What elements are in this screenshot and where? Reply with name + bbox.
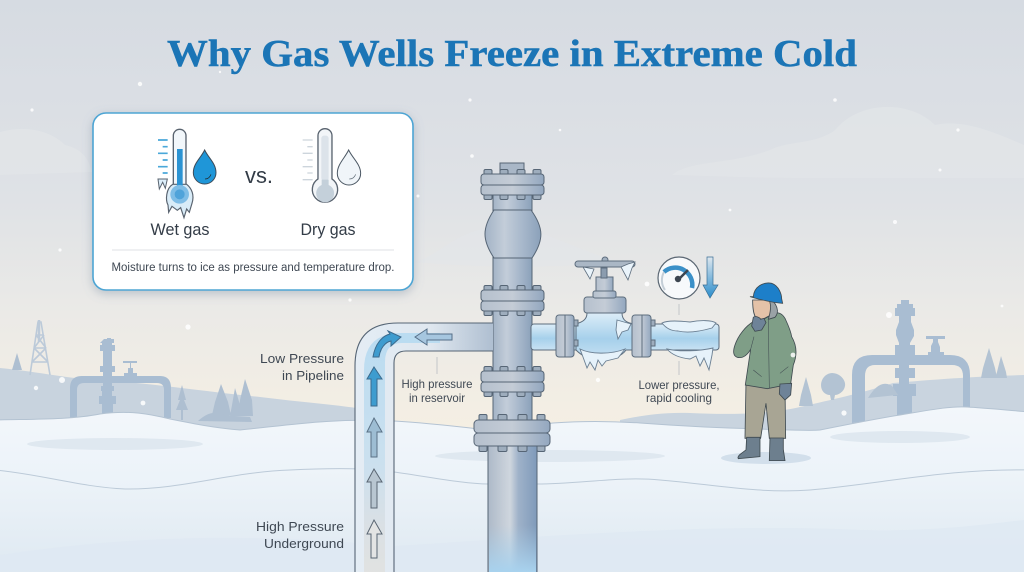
- gauge: [658, 257, 700, 299]
- snow field near: [0, 469, 1024, 572]
- lower column: [488, 445, 537, 572]
- label: low pressure: [260, 351, 344, 383]
- label: high pressure underground: Underground: [264, 536, 344, 551]
- label: high pressure in reservoir: [402, 377, 473, 405]
- flange: left: [556, 315, 578, 357]
- label: high pressure underground: [256, 519, 344, 551]
- flange: top: [481, 170, 544, 200]
- hard hat: [750, 283, 783, 303]
- distant wellhead left: [70, 338, 171, 418]
- label: lower pressure: [638, 378, 720, 405]
- label: high pressure underground: High Pressure: [256, 519, 344, 534]
- glove: chin: [752, 317, 766, 331]
- icon: wet gas thermometer: [158, 129, 193, 218]
- distant derrick: [30, 320, 50, 375]
- bulge: [485, 210, 541, 258]
- ice on outlet: [662, 321, 716, 370]
- ice drip: [616, 320, 631, 339]
- coat: [734, 313, 796, 389]
- upper column: [493, 195, 532, 421]
- panel: wet vs dry gas: [93, 113, 413, 290]
- elbow pipe: [355, 323, 493, 572]
- ice on valve: [580, 349, 625, 370]
- clouds: [0, 107, 1024, 266]
- label: lower pressure: Lower pressure,: [638, 378, 720, 392]
- title: Why Gas Wells Freeze in Extreme Cold: [167, 33, 857, 75]
- arrow: up 4: [367, 520, 382, 558]
- snowflakes: [30, 71, 1003, 416]
- worker: [734, 283, 796, 461]
- distant wellhead right: [852, 300, 970, 423]
- boots: [738, 437, 760, 459]
- snow field far: [0, 407, 1024, 572]
- label: high pressure in reservoir: in reservoir: [409, 391, 465, 405]
- frozen outlet pipe: [531, 257, 719, 370]
- face: [753, 300, 772, 319]
- arrow: left: [415, 329, 452, 345]
- icon: dry gas thermometer: [303, 129, 338, 202]
- flange: middle: [481, 286, 544, 316]
- text: vs.: vs.: [245, 163, 273, 188]
- valve body: [576, 313, 634, 360]
- snow foreground: [0, 520, 1024, 572]
- trousers: [745, 383, 786, 438]
- arrow: curved: [373, 331, 401, 357]
- arrow: up 1: [367, 367, 382, 406]
- caption: Moisture turns to ice as pressure and temperature drop.: [112, 262, 394, 274]
- flange: base: [474, 414, 550, 452]
- far hills right: [620, 375, 1024, 440]
- glove: hand: [779, 383, 792, 400]
- arrow: up 3: [367, 469, 382, 508]
- wellhead column: [474, 163, 550, 572]
- label: wet gas: Wet gas: [150, 221, 210, 239]
- arrow: pressure down: [703, 257, 718, 298]
- distant trees left: [12, 353, 253, 422]
- distant trees right: [799, 348, 1007, 406]
- icon: dry gas drop: [337, 150, 361, 185]
- label: dry gas: Dry gas: [300, 221, 356, 239]
- flange: lower: [481, 366, 544, 396]
- label: lower pressure: rapid cooling: [646, 391, 712, 405]
- arrow: up 2: [367, 418, 382, 457]
- label: low pressure: in Pipeline: [282, 368, 344, 383]
- label: low pressure: Low Pressure: [260, 351, 344, 366]
- far hills left: [0, 368, 370, 440]
- snow shadows: [27, 431, 970, 464]
- handwheel: [575, 257, 635, 280]
- valve bonnet: [584, 268, 626, 313]
- top cap: [500, 163, 524, 175]
- flange: right: [632, 315, 655, 357]
- icon: wet gas drop: [193, 150, 216, 184]
- label: high pressure in reservoir: High pressure: [402, 377, 473, 391]
